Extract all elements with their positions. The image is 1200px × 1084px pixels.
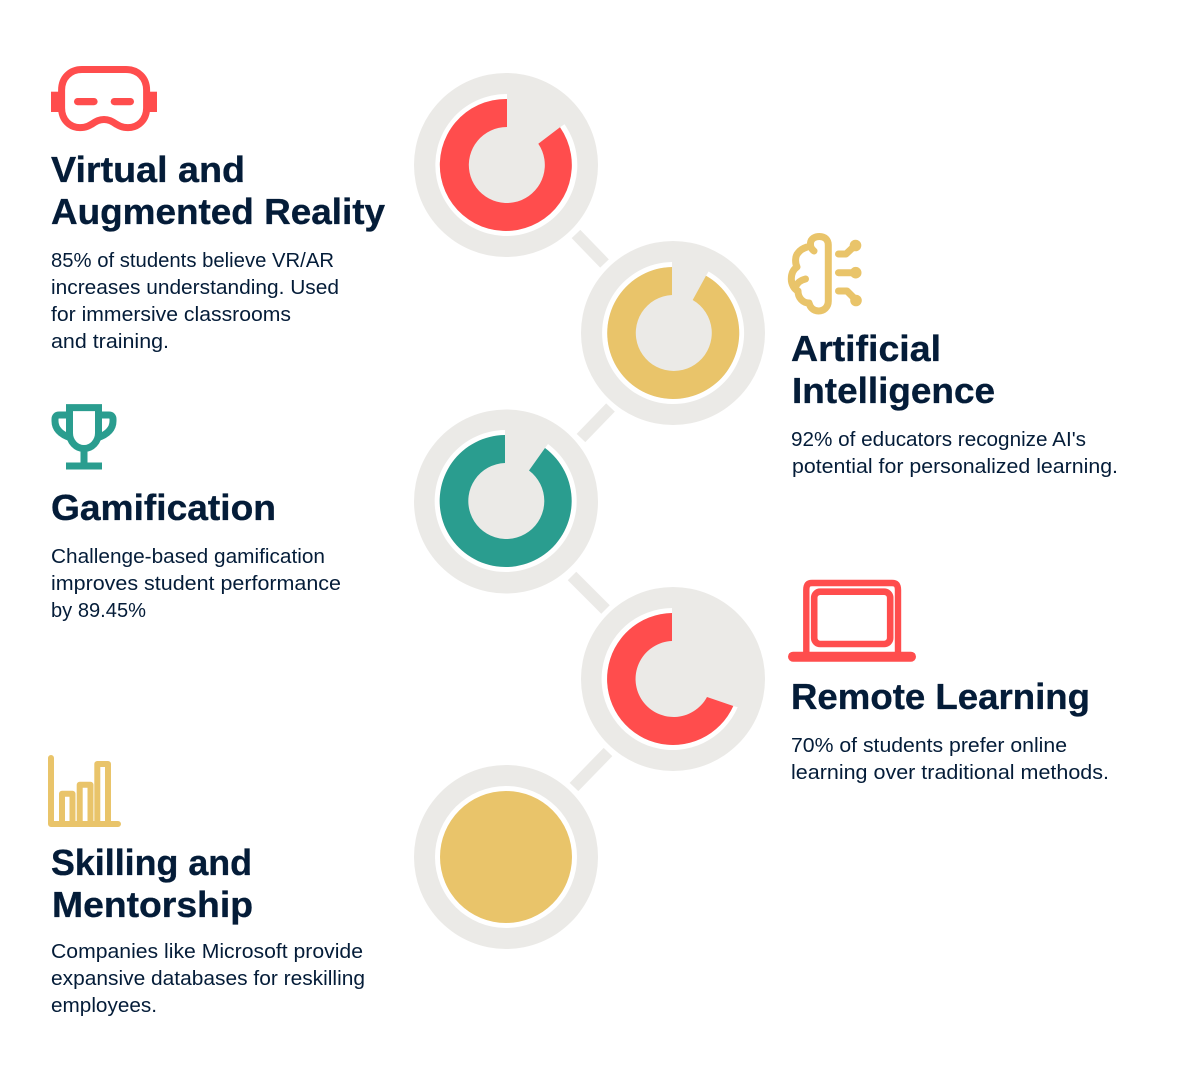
panel: artificial intelligence	[791, 236, 1118, 478]
body text	[51, 546, 341, 622]
heading: Remote Learning	[791, 676, 1090, 717]
panel: skilling and mentorship	[51, 758, 365, 1017]
body text	[51, 250, 339, 353]
heading	[51, 149, 385, 232]
icon: VR headset	[51, 70, 157, 128]
panel: remote learning	[788, 583, 1109, 784]
body text: 70% of students prefer online	[791, 735, 1067, 757]
heading: Gamification	[51, 487, 276, 528]
donut: gamification 89.45%	[414, 410, 598, 594]
heading: Augmented Reality	[51, 191, 385, 232]
body text: potential for personalized learning.	[792, 456, 1118, 478]
heading: Virtual and	[51, 149, 245, 190]
heading: Skilling and	[51, 842, 252, 883]
body text	[791, 735, 1109, 784]
body text	[791, 429, 1118, 478]
icon: brain with circuit nodes	[791, 236, 862, 311]
body text: and training.	[51, 331, 169, 353]
panel: gamification	[51, 408, 341, 622]
body text: increases understanding. Used	[51, 277, 339, 299]
body text: employees.	[51, 995, 157, 1017]
icon: trophy	[55, 408, 113, 466]
icon: laptop	[788, 583, 916, 662]
donut: remote learning 70%	[581, 587, 765, 771]
donut: artificial intelligence 92%	[581, 241, 765, 425]
icon: bar chart	[51, 758, 118, 824]
donut: virtual and augmented reality 85%	[414, 73, 598, 257]
heading: Artificial	[791, 328, 941, 369]
heading: Intelligence	[792, 370, 995, 411]
body text: 92% of educators recognize AI's	[791, 429, 1086, 451]
heading: Mentorship	[52, 884, 253, 925]
panel: virtual and augmented reality	[51, 70, 385, 353]
body text: 85% of students believe VR/AR	[51, 250, 334, 272]
body text: Companies like Microsoft provide	[51, 941, 363, 963]
body text: improves student performance	[51, 573, 341, 595]
heading	[791, 328, 995, 411]
disc: skilling and mentorship	[414, 765, 598, 949]
body text: Challenge-based gamification	[51, 546, 325, 568]
body text: expansive databases for reskilling	[51, 968, 365, 990]
connector lines between circles	[572, 234, 610, 787]
body text: by 89.45%	[51, 600, 146, 622]
heading	[51, 842, 253, 925]
body text	[51, 941, 365, 1017]
body text: for immersive classrooms	[51, 304, 291, 326]
body text: learning over traditional methods.	[791, 762, 1109, 784]
